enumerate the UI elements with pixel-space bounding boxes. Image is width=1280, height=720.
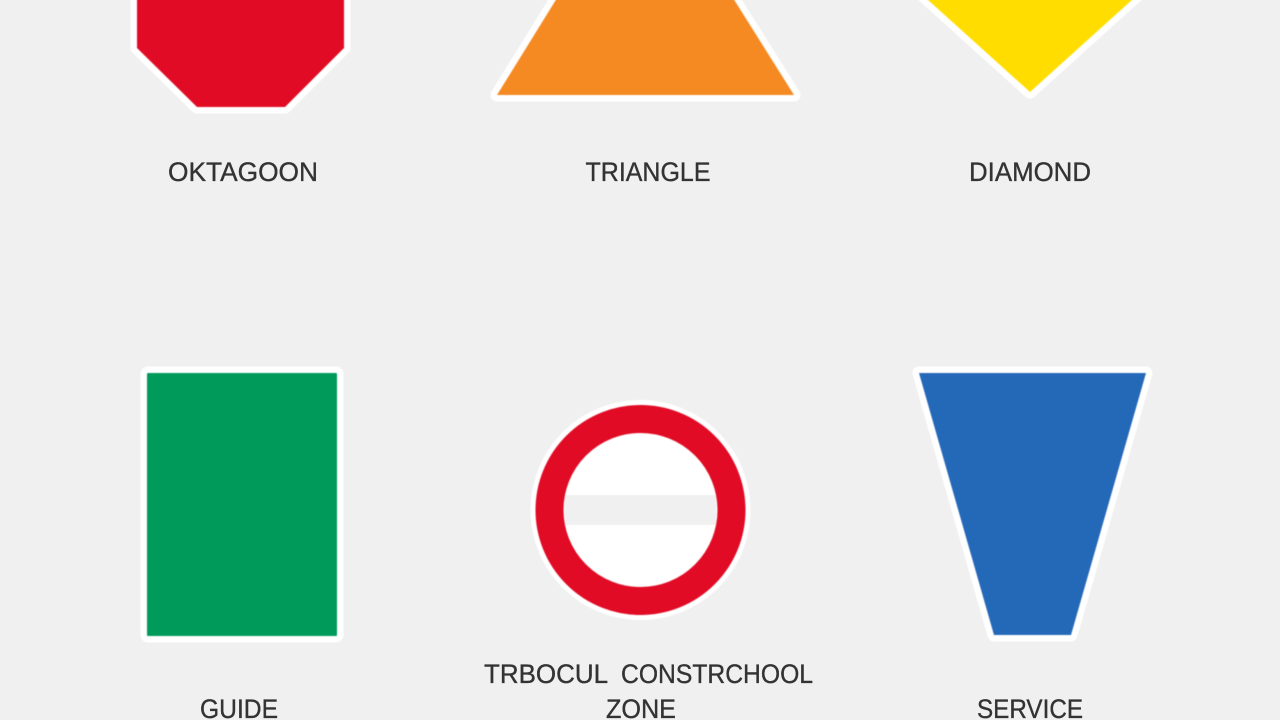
panel: school zone sign <box>484 400 813 720</box>
label: diamond: DIAMOND <box>969 157 1091 187</box>
label: school zone: TRBOCUL <box>484 659 608 689</box>
icon: yellow diamond <box>917 0 1143 92</box>
label: triangle: TRIANGLE <box>586 157 710 187</box>
panel: guide sign <box>147 373 337 720</box>
label: octagon: OKTAGOON <box>168 157 318 187</box>
icon: green rectangle <box>147 373 337 636</box>
icon: orange triangle <box>497 0 794 95</box>
panel: service sign <box>919 373 1146 720</box>
icon: red ring circle <box>530 400 750 620</box>
panel: diamond sign <box>917 0 1143 187</box>
label: school zone: CONSTRCHOOL <box>621 659 813 689</box>
label: school zone <box>484 659 813 720</box>
icon: red octagon <box>137 0 344 107</box>
icon: blue trapezoid <box>919 373 1146 635</box>
panel: triangle sign <box>497 0 794 187</box>
panel: octagon sign <box>137 0 344 187</box>
